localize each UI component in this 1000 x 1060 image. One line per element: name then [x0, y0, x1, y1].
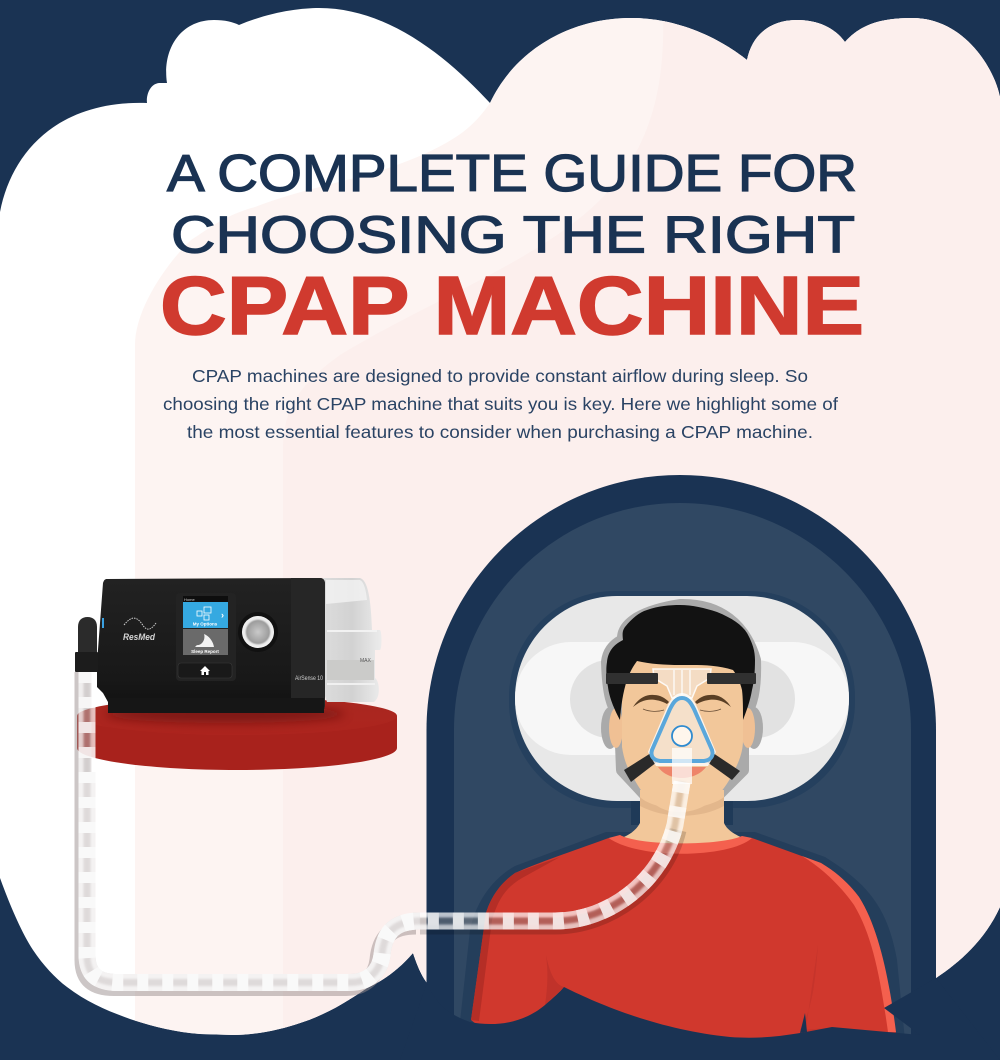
- intro paragraph: the most essential features to consider when purchasing a CPAP machine.: [187, 422, 813, 442]
- shirt: [471, 838, 900, 1040]
- neck: [612, 790, 752, 858]
- model label: AirSense 10: [295, 675, 323, 682]
- control knob: [238, 612, 278, 652]
- dome backdrop: [426, 475, 936, 1060]
- stand: [77, 697, 397, 770]
- head shadow: [607, 605, 755, 812]
- home button: [178, 663, 232, 678]
- intro paragraph: [163, 366, 838, 442]
- body: [97, 578, 325, 713]
- pillow: [509, 591, 855, 808]
- side panel: [291, 578, 325, 713]
- display: sleep report: Sleep Report: [191, 649, 219, 654]
- display top bar: [183, 596, 228, 602]
- sleeve fold right: [800, 945, 830, 1035]
- display top bar: Home: [184, 597, 195, 602]
- ears: [609, 708, 755, 748]
- tube connector cap: [75, 617, 98, 672]
- intro paragraph: CPAP machines are designed to provide constant airflow during sleep. So: [192, 366, 808, 386]
- tube underlay: [87, 772, 420, 982]
- ear shadows: [601, 707, 763, 749]
- tube core: [420, 782, 682, 921]
- tube shadow: [83, 672, 678, 988]
- nasal mask: [648, 693, 716, 784]
- face: [622, 658, 743, 812]
- display: my options: [183, 602, 228, 628]
- air tube: [78, 672, 690, 991]
- title: CPAP MACHINE: [160, 259, 864, 352]
- collar: [609, 835, 752, 854]
- hair: [606, 605, 755, 720]
- title: [160, 145, 864, 352]
- display: my options: ›: [221, 610, 224, 620]
- neck side shadow: [631, 801, 733, 825]
- logo wave: [124, 618, 156, 629]
- title: A COMPLETE GUIDE FOR: [167, 145, 857, 203]
- water tank: [323, 578, 382, 702]
- display frame: [176, 593, 236, 681]
- logo text: ResMed: [123, 632, 155, 643]
- sleeve fold: [545, 955, 564, 1005]
- head straps: [606, 673, 756, 684]
- chin shadow: [640, 797, 724, 816]
- status light: [102, 618, 104, 628]
- person: [458, 605, 905, 1040]
- lips: [658, 767, 706, 778]
- base: [108, 698, 324, 713]
- shirt shadow: [458, 832, 905, 1040]
- tank max label: MAX: [360, 658, 372, 664]
- lower straps: [624, 753, 740, 782]
- intro paragraph: choosing the right CPAP machine that suits you is key. Here we highlight some of: [163, 394, 838, 414]
- sleeve gap: [800, 1013, 807, 1033]
- display: sleep report: [183, 629, 228, 655]
- eyelids: [643, 709, 721, 711]
- CPAP machine: [97, 578, 382, 713]
- title: CHOOSING THE RIGHT: [171, 206, 855, 264]
- mask forehead support: [653, 669, 711, 698]
- shirt right edge highlight: [802, 856, 896, 1032]
- shirt left edge shade: [471, 857, 560, 1021]
- display: my options: My Options: [193, 622, 218, 626]
- bottom navy foreground: [400, 978, 1000, 1060]
- eyebrows: [633, 695, 731, 707]
